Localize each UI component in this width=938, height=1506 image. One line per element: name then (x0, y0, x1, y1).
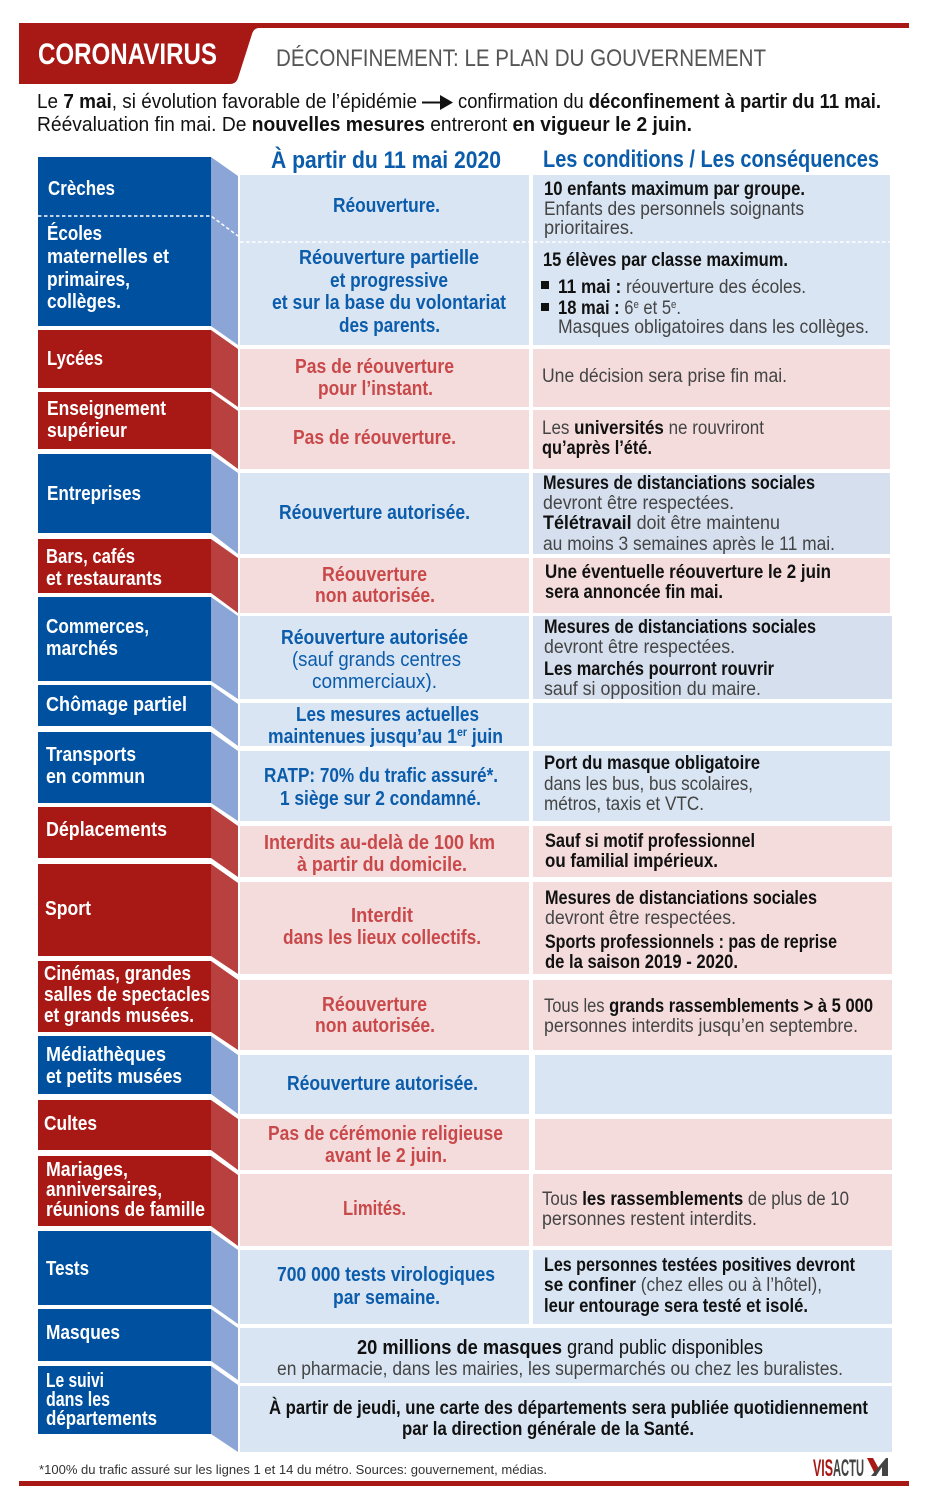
row: travel: Sauf si motif professionnel (545, 831, 755, 852)
row: shops, markets: devront être respectées. (544, 637, 735, 658)
row: lycées: Pas de réouverture (295, 356, 454, 378)
row: partial unemployment: Chômage partiel (46, 694, 187, 716)
row: lycées: pour l’instant. (318, 378, 433, 400)
row: weddings, family events: Mariages, (46, 1159, 128, 1181)
row: tests: 700 000 tests virologiques (277, 1264, 495, 1286)
row: masks: Masques (46, 1322, 120, 1344)
row: lycées (38, 330, 890, 407)
row: crèches and schools: Crèches (48, 178, 115, 200)
row: sport: devront être respectées. (545, 908, 736, 929)
row: bars, cafés, restaurants: et restaurants (46, 568, 162, 590)
row: tests: se confiner (chez elles ou à l’hôtel), (544, 1275, 822, 1296)
subtitle: DÉCONFINEMENT: LE PLAN DU GOUVERNEMENT (276, 45, 766, 72)
row: shops, markets: Commerces, (46, 616, 149, 638)
row: religious services: Pas de cérémonie religieuse (268, 1123, 503, 1145)
row: cinemas, venues, museums: non autorisée. (315, 1015, 435, 1037)
title: CORONAVIRUS (38, 38, 217, 71)
bottom rule (19, 1481, 909, 1486)
header banner (19, 23, 909, 84)
row: tests: Les personnes testées positives devront (544, 1255, 856, 1276)
logo: Visactu (813, 1455, 888, 1482)
column heading: from 11 May: À partir du 11 mai 2020 (271, 146, 501, 174)
row: masks: 20 millions de masques grand public disponibles (357, 1337, 763, 1359)
row: crèches and schools: prioritaires. (544, 218, 634, 239)
row: partial unemployment: juin (467, 726, 503, 748)
row: cinemas, venues, museums: Cinémas, grandes (44, 963, 191, 985)
row: department tracking: départements (46, 1408, 157, 1430)
row: companies: Mesures de distanciations sociales (543, 473, 815, 494)
row: department tracking: par la direction générale de la Santé. (402, 1419, 694, 1440)
row: crèches and schools: Masques obligatoires dans les collèges. (558, 317, 869, 338)
row: companies: Télétravail doit être maintenu (543, 513, 780, 534)
row: department tracking: À partir de jeudi, une carte des départements sera publiée quotidiennement (269, 1397, 869, 1419)
row: masks: en pharmacie, dans les mairies, les supermarchés ou chez les buralistes. (277, 1359, 843, 1380)
row: higher education: Pas de réouverture. (293, 427, 456, 449)
row: crèches and schools: maternelles et (47, 246, 169, 268)
row: tests (38, 1231, 892, 1324)
row: public transport: dans les bus, bus scolaires, (544, 774, 753, 795)
row: bars, cafés, restaurants: Une éventuelle réouverture le 2 juin (545, 562, 831, 583)
row: travel: ou familial impérieux. (545, 851, 718, 872)
row: shops, markets (38, 597, 892, 700)
row: religious services: avant le 2 juin. (325, 1145, 447, 1167)
row: masks (38, 1309, 892, 1383)
row: cinemas, venues, museums: salles de spectacles (44, 984, 210, 1006)
intro text: Le 7 mai, si évolution favorable de l’épidémie (37, 91, 417, 113)
row: sport: Sport (45, 898, 91, 920)
intro text: confirmation du déconfinement à partir du 11 mai. (458, 91, 881, 113)
row: partial unemployment: maintenues jusqu’au 1 (268, 726, 484, 748)
row: public transport: RATP: 70% du trafic assuré*. (264, 765, 498, 787)
row: companies: au moins 3 semaines après le 11 mai. (543, 534, 835, 555)
row: cinemas, venues, museums: Réouverture (322, 994, 427, 1016)
row: department tracking: dans les (46, 1389, 110, 1411)
intro text (37, 91, 881, 136)
row: cinemas, venues, museums: Tous les grands rassemblements > à 5 000 (544, 996, 873, 1017)
row: bars, cafés, restaurants (38, 539, 890, 613)
row: department tracking (38, 1366, 892, 1452)
row: shops, markets: Réouverture autorisée (281, 627, 468, 649)
row: lycées: Lycées (47, 348, 103, 370)
row: shops, markets: commerciaux). (312, 671, 437, 693)
row: weddings, family events: personnes restent interdits. (542, 1209, 757, 1230)
row: crèches and schools: . (676, 298, 681, 319)
logo: Visactu: ACTU (833, 1455, 864, 1482)
row: shops, markets: sauf si opposition du maire. (544, 679, 761, 700)
row: tests: leur entourage sera testé et isolé. (544, 1296, 808, 1317)
row: public transport: 1 siège sur 2 condamné. (280, 788, 481, 810)
intro text: Réévaluation fin mai. De nouvelles mesures entreront en vigueur le 2 juin. (37, 114, 692, 136)
row: travel (38, 807, 892, 877)
row: weddings, family events: Tous les rassemblements de plus de 10 (542, 1189, 849, 1210)
row: crèches and schools: et sur la base du volontariat (272, 292, 506, 314)
row: sport: Interdit (351, 905, 413, 927)
row: public transport: Port du masque obligatoire (544, 753, 760, 774)
row: crèches and schools: Écoles (47, 222, 102, 245)
row: religious services (38, 1100, 892, 1170)
footnote and sources: *100% du trafic assuré sur les lignes 1 et 14 du métro. Sources: gouvernement, médias. (39, 1462, 547, 1477)
row: public transport: métros, taxis et VTC. (544, 794, 704, 815)
row: shops, markets: (sauf grands centres (292, 649, 461, 671)
row: travel: Interdits au-delà de 100 km (264, 832, 495, 854)
row: sport (38, 864, 892, 974)
row: companies: devront être respectées. (543, 493, 734, 514)
row: crèches and schools: e (671, 299, 676, 311)
row: sport: Sports professionnels : pas de reprise (545, 932, 837, 953)
row: public transport: en commun (46, 766, 145, 788)
row: tests: par semaine. (333, 1287, 440, 1309)
row: shops, markets: marchés (46, 638, 118, 660)
row: weddings, family events (38, 1156, 892, 1246)
row: crèches and schools: Enfants des personnels soignants (544, 199, 804, 220)
row: crèches and schools: collèges. (47, 291, 121, 313)
row: crèches and schools: Réouverture. (333, 195, 440, 217)
row: cinemas, venues, museums: personnes interdits jusqu’en septembre. (544, 1016, 858, 1037)
row: higher education: Les universités ne rouvriront (542, 418, 765, 439)
row: crèches and schools: des parents. (339, 315, 440, 337)
row: sport: Mesures de distanciations sociales (545, 888, 817, 909)
row: crèches and schools: et progressive (330, 270, 448, 292)
row: sport: de la saison 2019 - 2020. (545, 952, 738, 973)
row: libraries, small museums: Réouverture autorisée. (287, 1073, 478, 1095)
row: crèches and schools: 10 enfants maximum par groupe. (544, 179, 805, 200)
row: crèches and schools: et 5 (639, 298, 671, 319)
row: department tracking: Le suivi (46, 1370, 104, 1392)
row: higher education: Enseignement (47, 398, 166, 420)
row: bars, cafés, restaurants: sera annoncée fin mai. (545, 582, 723, 603)
row: religious services: Cultes (44, 1113, 97, 1135)
row: partial unemployment: er (457, 725, 467, 739)
row: travel: Déplacements (46, 819, 167, 841)
row: cinemas, venues, museums: et grands musées. (44, 1005, 194, 1027)
row: crèches and schools: e (633, 299, 639, 311)
row: lycées: Une décision sera prise fin mai. (542, 366, 787, 387)
row: companies: Réouverture autorisée. (279, 502, 470, 524)
arrow (422, 95, 453, 110)
row: bars, cafés, restaurants: Bars, cafés (46, 546, 135, 568)
row: public transport: Transports (46, 744, 136, 766)
row: partial unemployment (38, 685, 892, 748)
row: public transport (38, 732, 890, 821)
row: higher education: supérieur (47, 420, 127, 442)
row: bars, cafés, restaurants: Réouverture (322, 564, 427, 586)
row: tests: Tests (46, 1258, 89, 1280)
row: cinemas, venues, museums (38, 961, 892, 1050)
column heading: conditions: Les conditions / Les conséquences (543, 146, 879, 173)
row: higher education: qu’après l’été. (542, 438, 652, 459)
row: crèches and schools: 11 mai : réouverture des écoles. (558, 277, 806, 298)
row: shops, markets: Les marchés pourront rouvrir (544, 659, 775, 680)
row: libraries, small museums: et petits musées (46, 1066, 182, 1088)
logo: Visactu: VIS (813, 1455, 833, 1482)
row: crèches and schools: 15 élèves par classe maximum. (543, 250, 788, 271)
row: libraries, small museums: Médiathèques (46, 1044, 166, 1066)
row: crèches and schools: primaires, (47, 269, 130, 291)
row: companies (38, 454, 890, 555)
row: libraries, small museums (38, 1036, 892, 1114)
row: crèches and schools: Réouverture partielle (299, 247, 479, 269)
row: companies: Entreprises (47, 483, 141, 505)
row: weddings, family events: Limités. (343, 1198, 406, 1220)
row: sport: dans les lieux collectifs. (283, 927, 481, 949)
row: crèches and schools: 18 mai : 6 (558, 298, 636, 319)
row: travel: à partir du domicile. (297, 854, 467, 876)
row: weddings, family events: anniversaires, (46, 1179, 162, 1201)
row: weddings, family events: réunions de famille (46, 1199, 205, 1221)
row: crèches and schools (38, 157, 890, 345)
row: shops, markets: Mesures de distanciations sociales (544, 617, 816, 638)
row: higher education (38, 392, 890, 469)
row: partial unemployment: Les mesures actuelles (296, 704, 479, 726)
row: bars, cafés, restaurants: non autorisée. (315, 585, 435, 607)
